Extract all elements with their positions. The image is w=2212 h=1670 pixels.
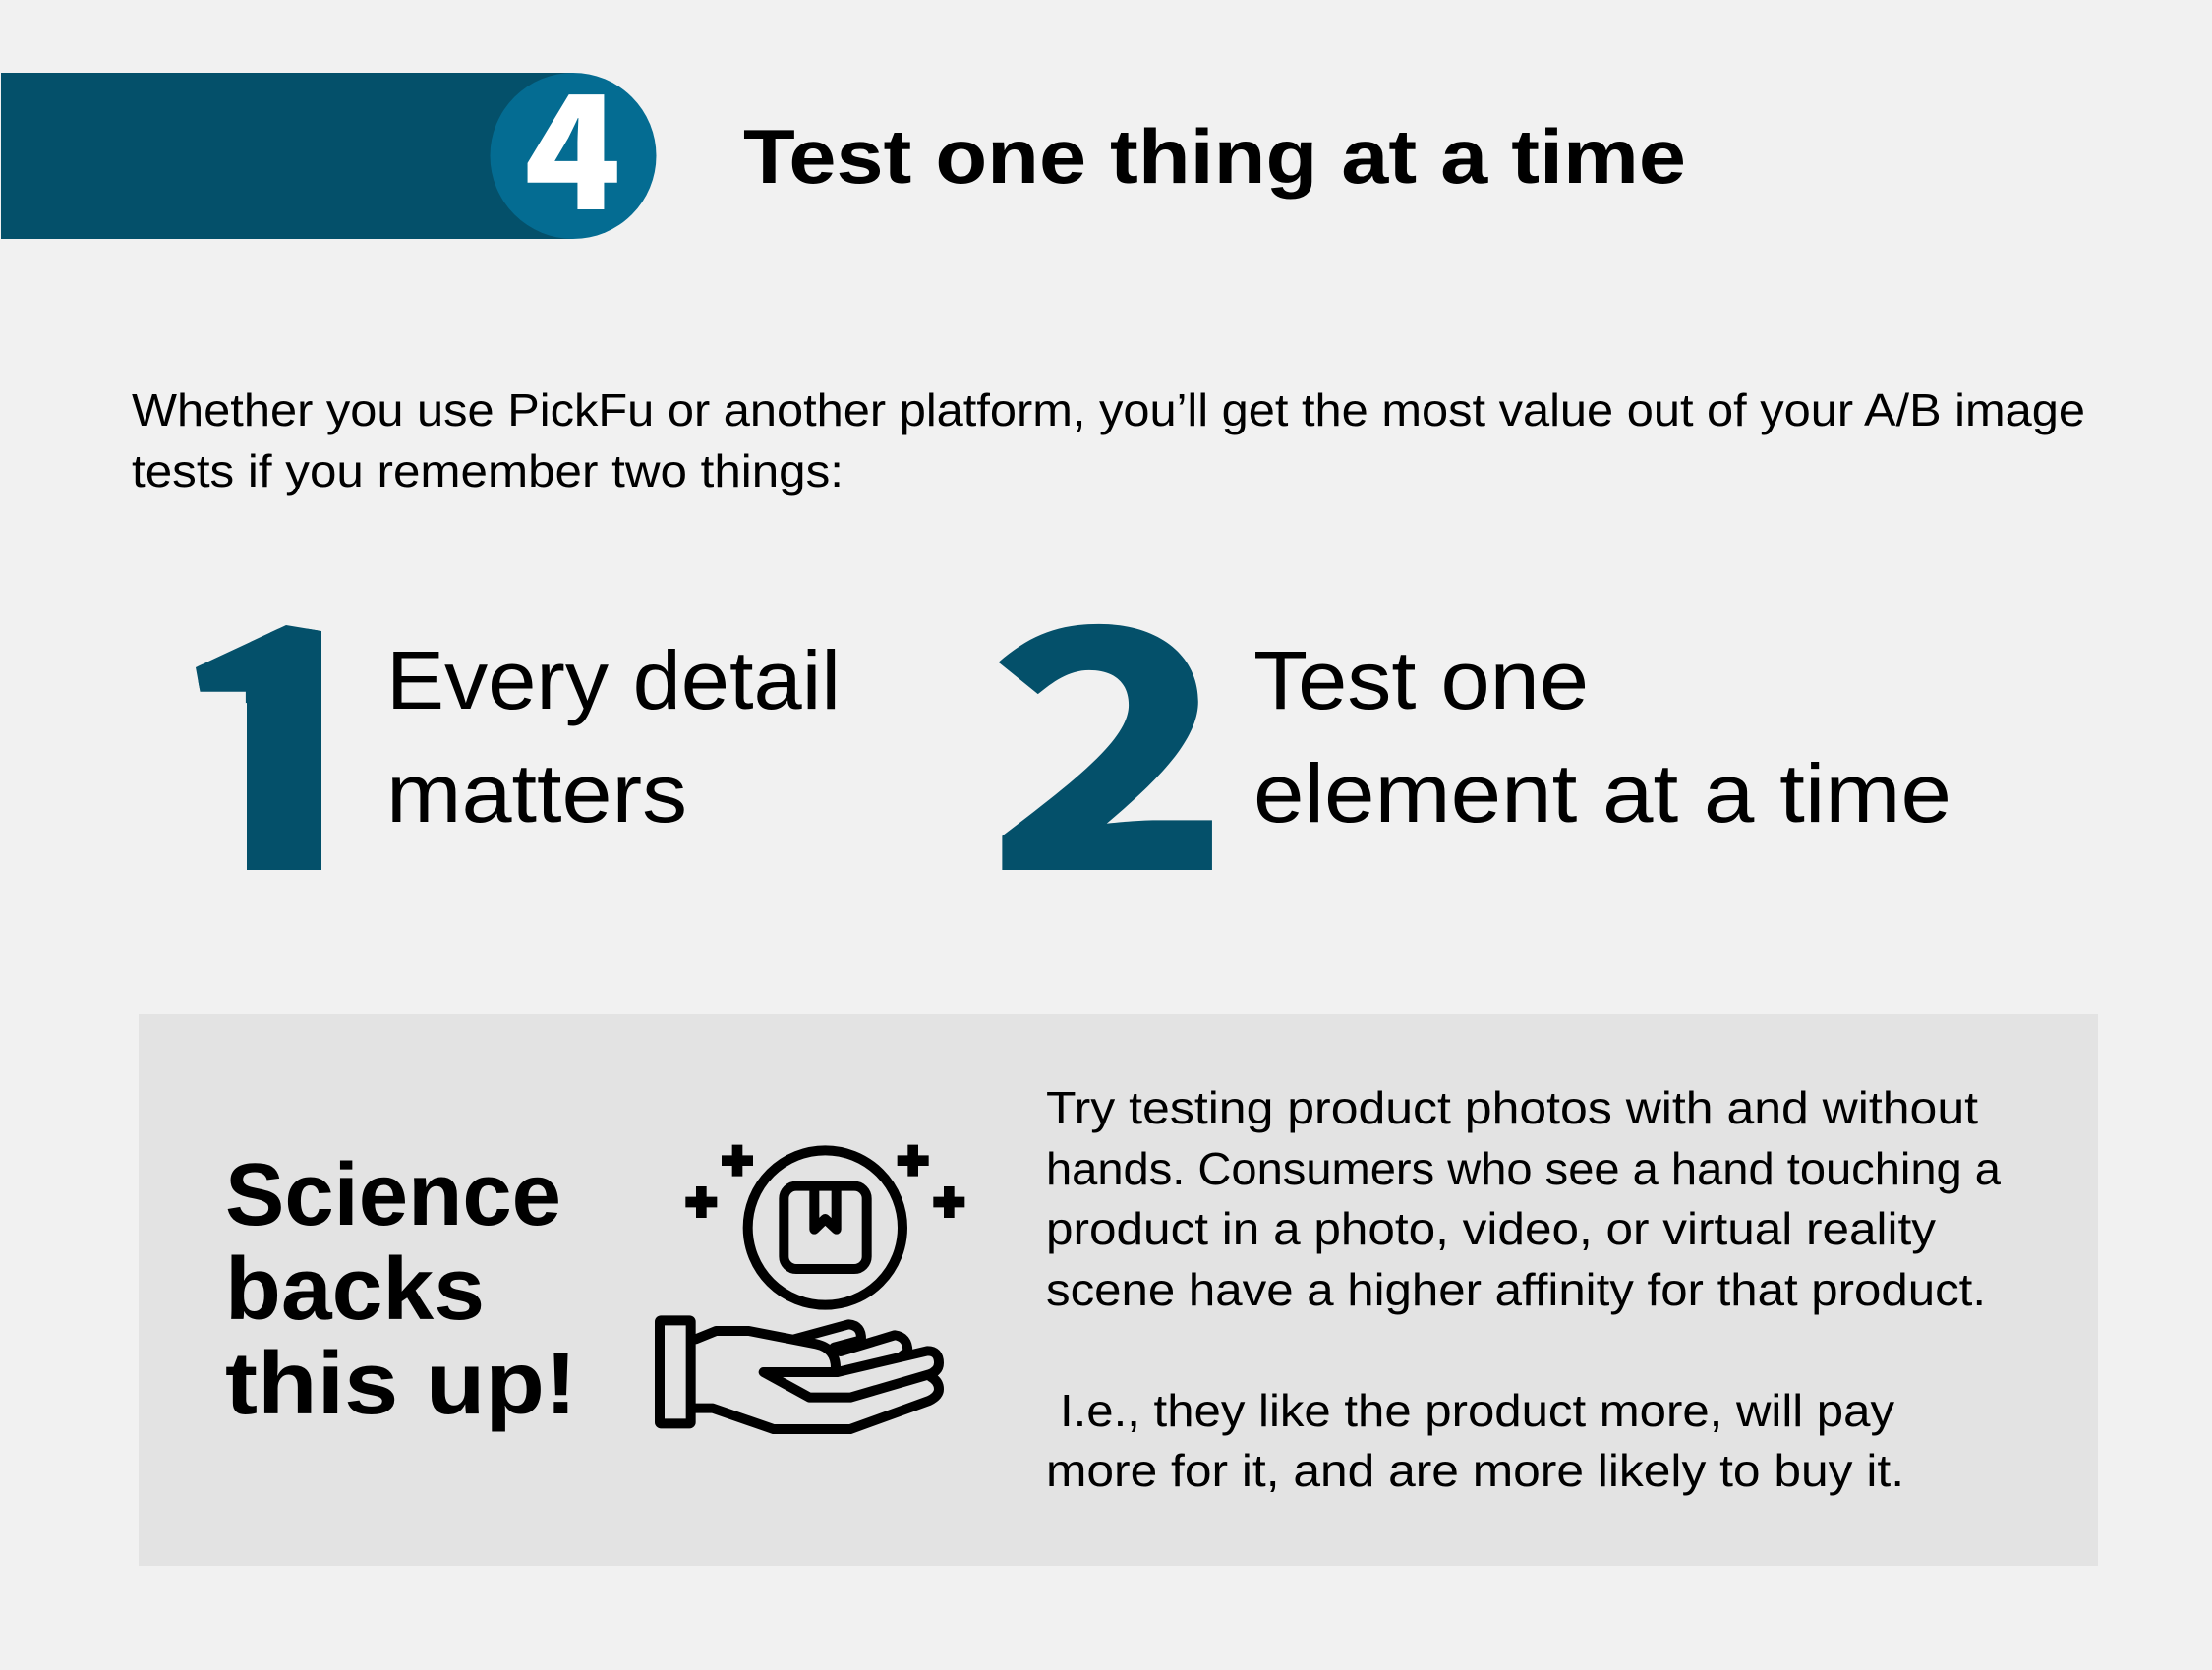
point 2 text: Test one xyxy=(1253,634,1589,726)
panel: science callout xyxy=(139,1014,2098,1566)
band xyxy=(1,73,573,239)
callout body text xyxy=(1046,1082,2001,1496)
intro paragraph: Whether you use PickFu or another platform, you’ll get the most value out of your A/B image xyxy=(132,384,2085,435)
header band with number 4 xyxy=(1,27,657,256)
callout body text: scene have a higher affinity for that product. xyxy=(1046,1264,1986,1315)
panel background xyxy=(139,1014,2098,1566)
intro paragraph: tests if you remember two things: xyxy=(132,445,844,496)
point 2 xyxy=(985,486,1951,966)
point 1 text: Every detail xyxy=(386,634,841,726)
point 1 text: matters xyxy=(386,747,687,839)
callout body text: Try testing product photos with and without xyxy=(1046,1082,1978,1133)
callout body text: hands. Consumers who see a hand touching a xyxy=(1046,1143,2001,1194)
point 1 xyxy=(160,486,841,966)
callout heading: Science xyxy=(225,1146,561,1244)
number circle xyxy=(490,73,657,239)
point 1 text xyxy=(386,634,841,839)
digit 2: 2 xyxy=(985,486,1233,966)
callout body text: more for it, and are more likely to buy it. xyxy=(1046,1445,1904,1496)
callout heading xyxy=(225,1146,577,1433)
number 4: 4 xyxy=(524,27,621,256)
title: Test one thing at a time xyxy=(743,113,1686,200)
callout heading: this up! xyxy=(225,1335,577,1433)
callout body text: product in a photo, video, or virtual reality xyxy=(1046,1203,1936,1254)
callout body text: I.e., they like the product more, will pay xyxy=(1060,1385,1894,1436)
point 2 text: element at a time xyxy=(1253,747,1951,839)
icon: hand holding product xyxy=(660,1145,964,1429)
digit 1: 1 xyxy=(160,486,392,966)
intro paragraph xyxy=(132,384,2085,496)
point 2 text xyxy=(1253,634,1951,839)
callout heading: backs xyxy=(225,1240,485,1339)
